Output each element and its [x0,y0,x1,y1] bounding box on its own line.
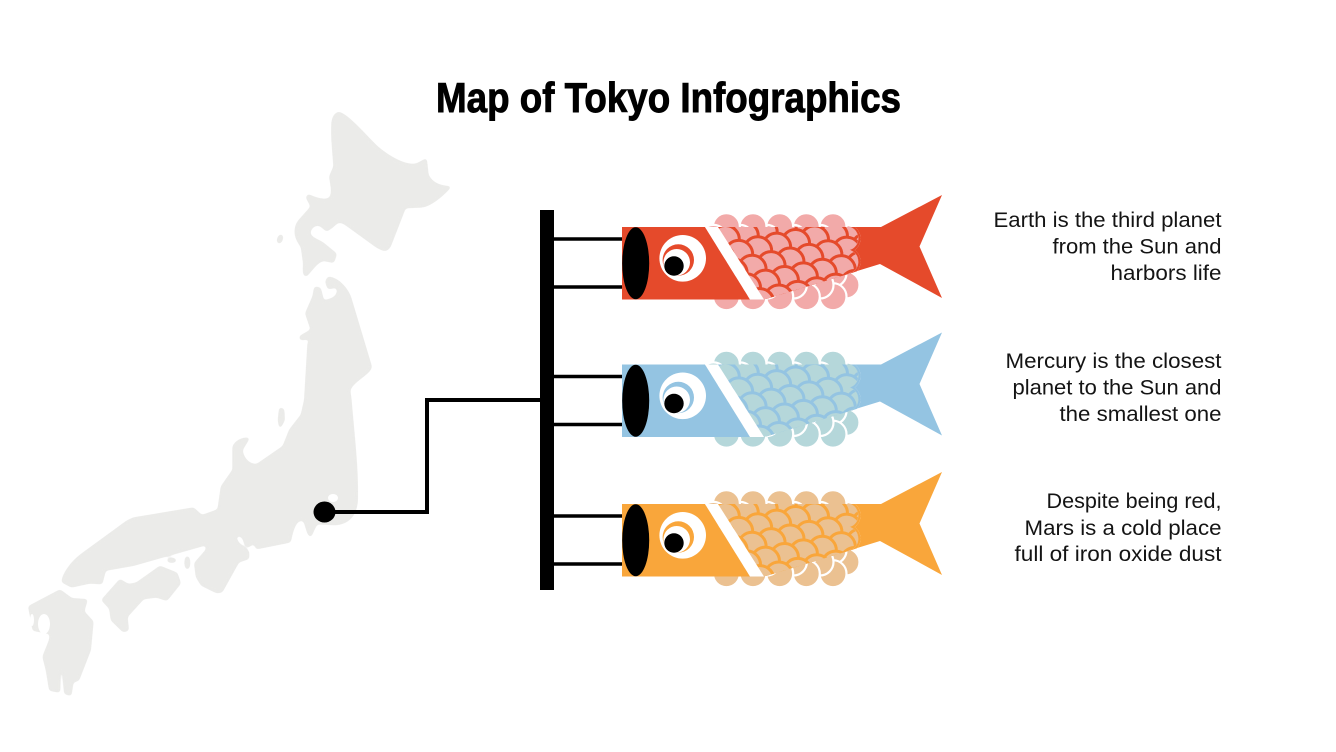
map: Awaji island [168,559,176,562]
fish: blue [554,332,942,447]
text: Mars: full of iron oxide dust [1014,542,1222,566]
map: Kyushu [29,590,93,695]
title: Map of Tokyo Infographics [436,74,901,121]
map: Hokkaido [295,113,450,276]
fish: orange [554,472,942,586]
text: Earth [994,208,1222,285]
text: Mercury [1006,349,1222,426]
pole [540,210,554,590]
text: Mercury: the smallest one [1060,402,1222,426]
text: Mercury: Mercury is the closest [1006,349,1222,373]
map of Japan [29,113,450,695]
map: Shikoku [102,567,180,631]
text: Earth: from the Sun and [1052,234,1222,258]
map: Sado island [279,408,284,427]
marker: Tokyo [314,502,336,522]
text: Mercury: planet to the Sun and [1012,376,1222,400]
map: Honshu [62,277,371,592]
text: Earth: harbors life [1110,261,1222,285]
text: Mars [1014,489,1222,566]
map: Tokyo Bay [328,494,338,502]
connector line from Tokyo to pole [314,400,545,522]
map: small island [277,235,283,243]
map: Kyushu coastal inlets [30,614,50,647]
text: Mars: Mars is a cold place [1024,516,1222,540]
fish: red [554,195,942,310]
map: Shodo island [185,557,189,569]
text: Earth: Earth is the third planet [994,208,1222,232]
text: Mars: Despite being red, [1046,489,1222,513]
